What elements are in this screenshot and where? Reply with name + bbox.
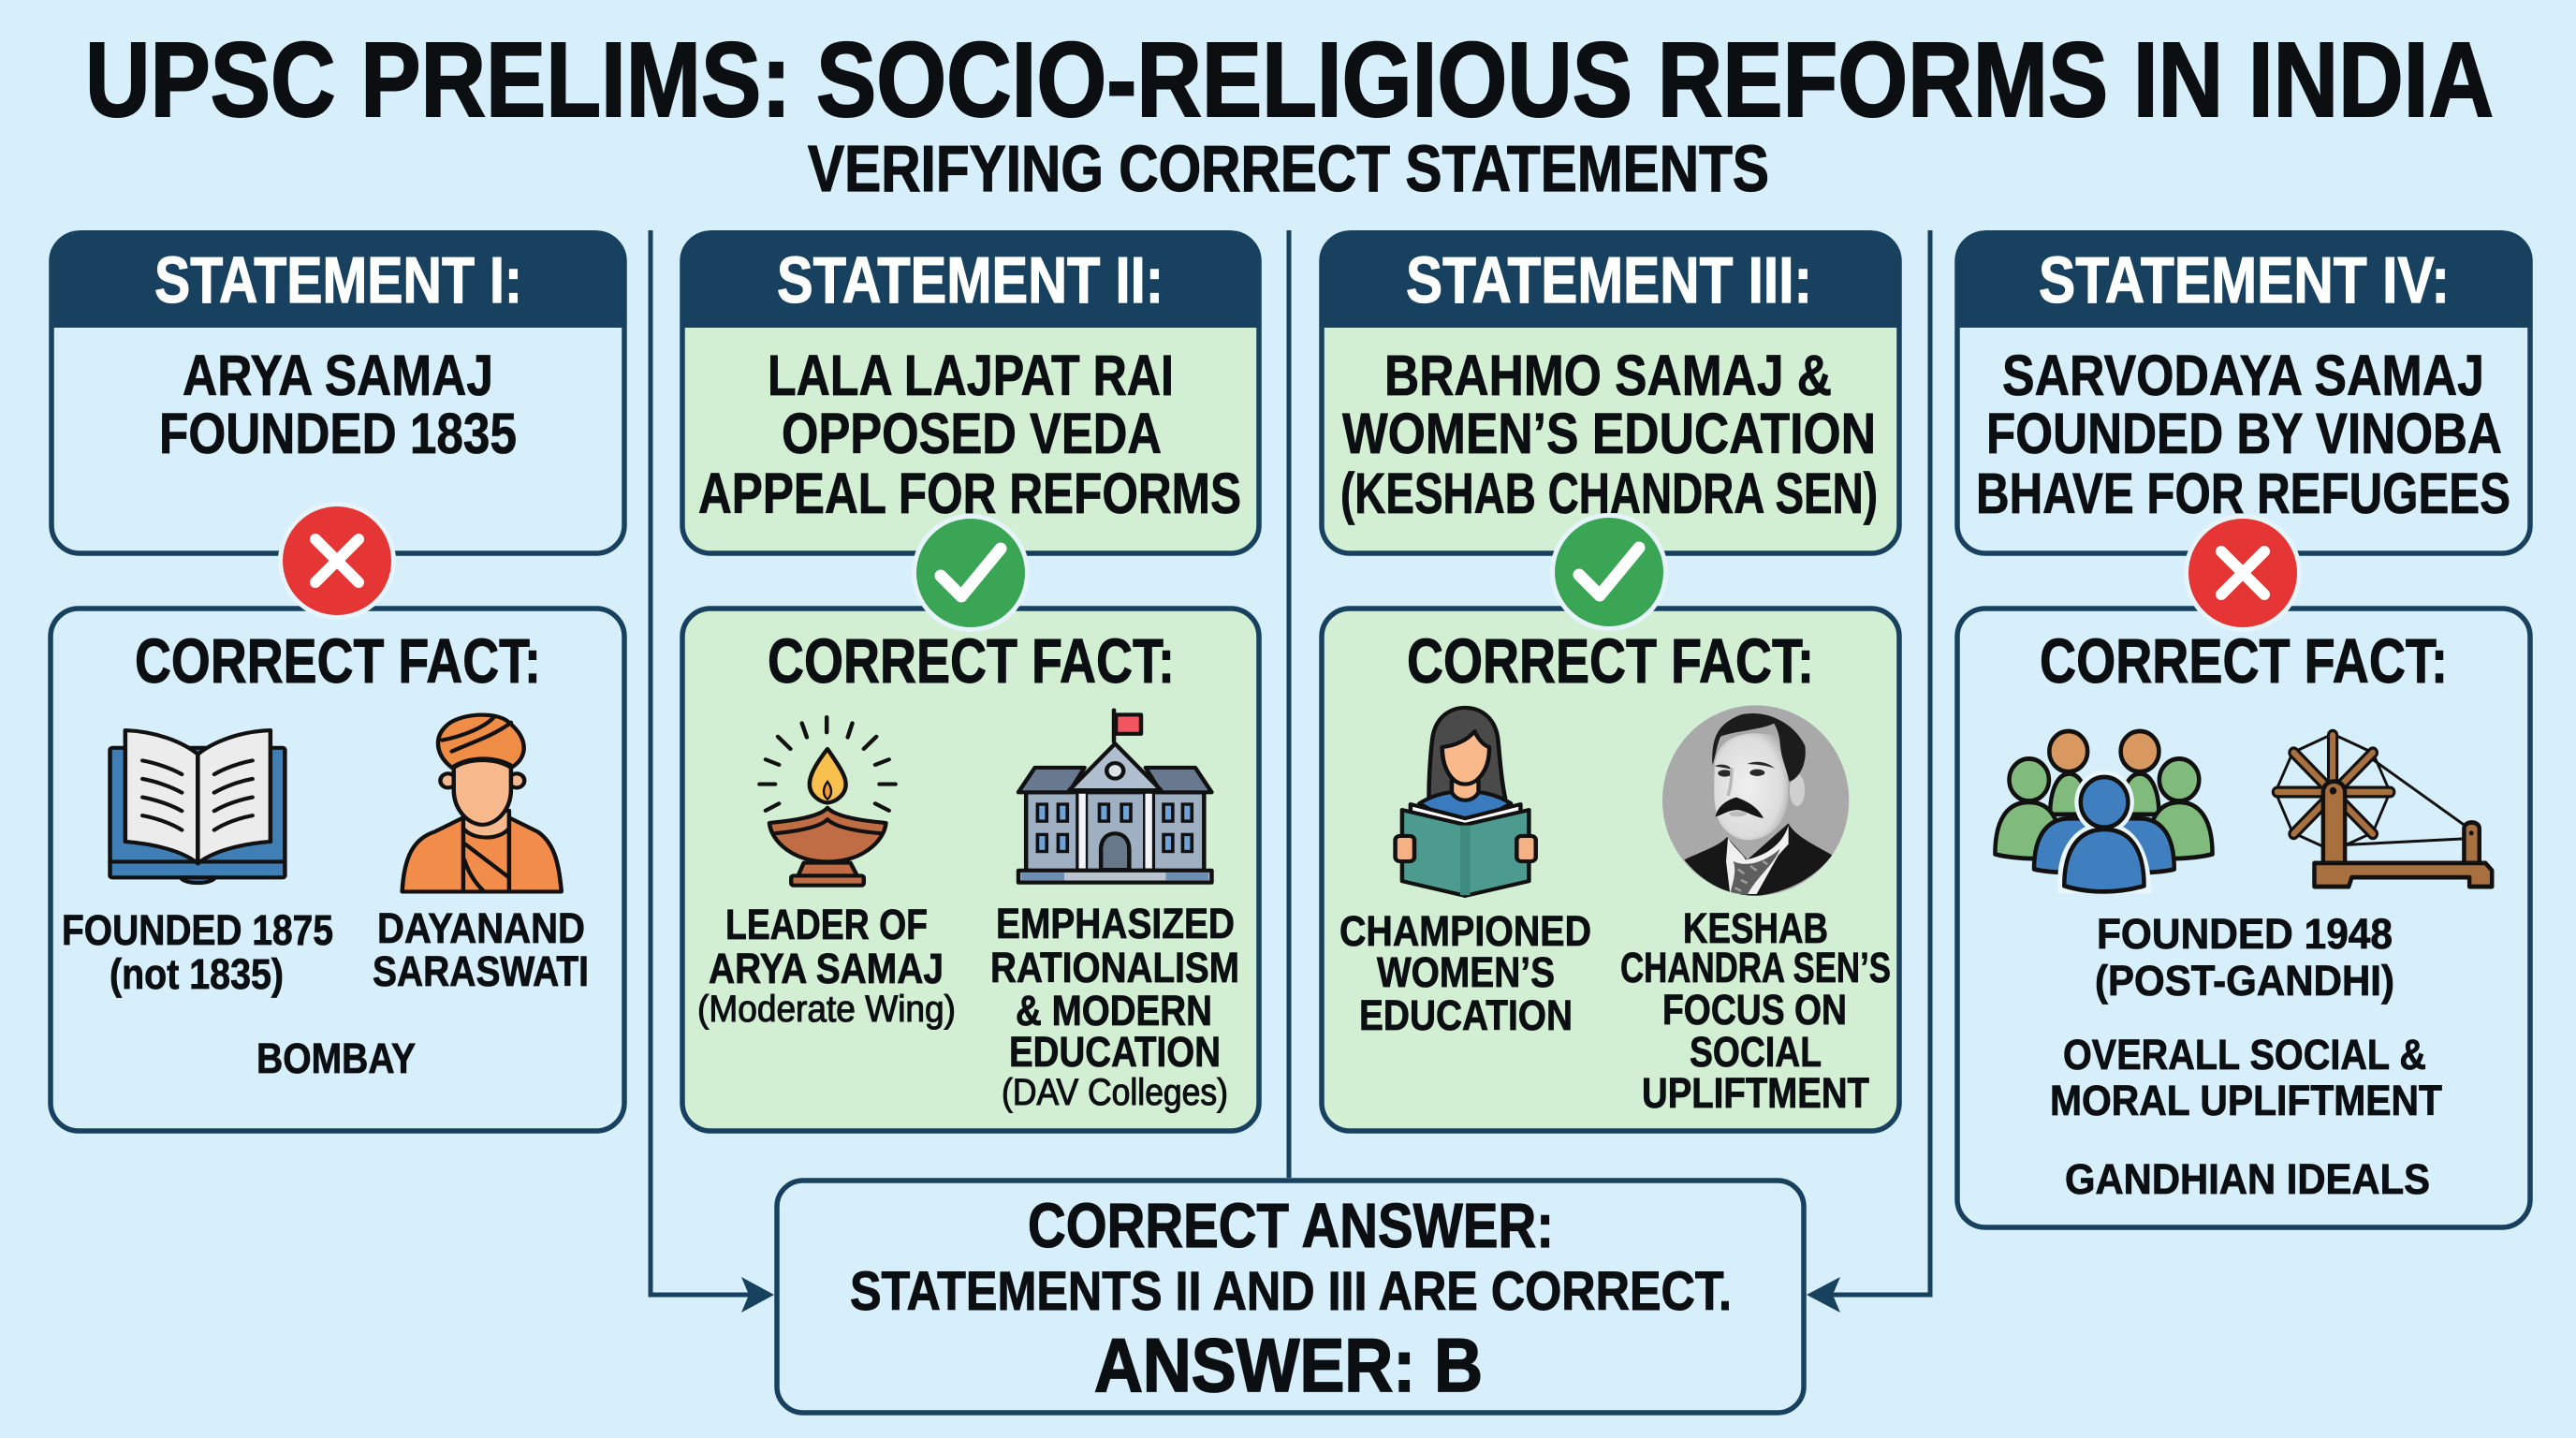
- text: women's education: EDUCATION: [1359, 991, 1573, 1039]
- icon: open book: [110, 730, 285, 883]
- text: statement IV claim: SARVODAYA SAMAJ: [2002, 344, 2484, 407]
- icon: spinning wheel: [2276, 734, 2492, 887]
- text: rationalism and education: [990, 900, 1239, 1113]
- text: rationalism and education: (DAV Colleges): [1002, 1072, 1228, 1113]
- icon: girl reading: [1396, 708, 1536, 896]
- arrow: right connector into answer box: [1807, 230, 1930, 1313]
- icon: green check badge III: [1550, 513, 1668, 631]
- text: statement II claim: APPEAL FOR REFORMS: [698, 462, 1241, 525]
- heading: statement I: STATEMENT I:: [154, 243, 522, 316]
- text: statement I claim: ARYA SAMAJ: [183, 344, 493, 407]
- panel: correct fact II: [682, 609, 1259, 1131]
- text: leader of Arya Samaj: (Moderate Wing): [697, 989, 956, 1030]
- text: founding date: (not 1835): [110, 950, 284, 998]
- text: statement III claim: BRAHMO SAMAJ &: [1384, 344, 1832, 407]
- panel: statement I: [51, 230, 625, 553]
- text: founder: [373, 904, 589, 995]
- text: place: BOMBAY: [256, 1034, 416, 1082]
- text: leader of Arya Samaj: [697, 901, 956, 1030]
- text: Gandhian ideals: GANDHIAN IDEALS: [2065, 1155, 2430, 1203]
- text: correct statements: STATEMENTS II AND III ARE CORRECT.: [850, 1261, 1732, 1322]
- text: rationalism and education: RATIONALISM: [990, 944, 1239, 991]
- text: statement III claim: WOMEN’S EDUCATION: [1342, 402, 1876, 465]
- text: founder: DAYANAND: [377, 904, 585, 952]
- heading: statement III: STATEMENT III:: [1406, 243, 1812, 316]
- text: Keshab Chandra Sen focus: FOCUS ON: [1662, 986, 1847, 1034]
- text: women's education: [1339, 907, 1591, 1039]
- heading: correct answer: CORRECT ANSWER:: [1028, 1191, 1554, 1261]
- icon: portrait of Keshab Chandra Sen: [1662, 705, 1849, 896]
- heading: correct fact IV: CORRECT FACT:: [2040, 626, 2448, 697]
- text: statement II claim: LALA LAJPAT RAI: [768, 344, 1174, 407]
- text: answer B: ANSWER: B: [1094, 1324, 1483, 1408]
- text: rationalism and education: & MODERN: [1016, 987, 1212, 1034]
- text: statement III claim: [1340, 344, 1878, 525]
- panel: correct fact III: [1322, 609, 1899, 1131]
- text: founding date: FOUNDED 1875: [62, 906, 333, 954]
- icon: turbaned reformer: [402, 715, 562, 891]
- text: statement I claim: [159, 344, 517, 465]
- text: founder: SARASWATI: [373, 947, 589, 995]
- icon: green check badge II: [912, 514, 1030, 632]
- text: founded 1948: (POST-GANDHI): [2095, 957, 2394, 1005]
- heading: correct fact I: CORRECT FACT:: [135, 626, 541, 697]
- heading: statement IV: STATEMENT IV:: [2039, 243, 2450, 316]
- text: Keshab Chandra Sen focus: UPLIFTMENT: [1642, 1069, 1869, 1117]
- text: founded 1948: FOUNDED 1948: [2097, 910, 2393, 958]
- panel: statement IV: [1956, 230, 2531, 553]
- heading: correct fact III: CORRECT FACT:: [1407, 626, 1814, 697]
- panel: statement II: [681, 230, 1260, 553]
- connector: centre line into answer box: [1286, 230, 1292, 1178]
- text: overall upliftment: MORAL UPLIFTMENT: [2050, 1077, 2442, 1124]
- text: overall upliftment: OVERALL SOCIAL &: [2063, 1031, 2426, 1078]
- icon: oil lamp: [759, 717, 896, 886]
- text: rationalism and education: EMPHASIZED: [996, 900, 1235, 947]
- text: statement II claim: OPPOSED VEDA: [782, 402, 1162, 465]
- text: rationalism and education: EDUCATION: [1009, 1028, 1221, 1076]
- text: statement II claim: [698, 344, 1241, 525]
- text: Keshab Chandra Sen focus: [1620, 904, 1891, 1117]
- text: Keshab Chandra Sen focus: KESHAB: [1683, 904, 1828, 952]
- text: Keshab Chandra Sen focus: CHANDRA SEN’S: [1620, 944, 1891, 991]
- icon: group of people: [1995, 731, 2213, 893]
- icon: college building: [1018, 711, 1211, 883]
- text: women's education: WOMEN’S: [1377, 948, 1555, 996]
- text: founded 1948: [2095, 910, 2394, 1005]
- text: leader of Arya Samaj: ARYA SAMAJ: [709, 945, 944, 992]
- text: women's education: CHAMPIONED: [1339, 907, 1591, 955]
- panel: correct fact I: [51, 609, 624, 1131]
- subtitle: VERIFYING CORRECT STATEMENTS: [808, 132, 1769, 205]
- icon: red cross badge I: [278, 502, 396, 620]
- panel: correct fact IV: [1957, 609, 2530, 1227]
- text: statement IV claim: [1976, 344, 2510, 525]
- text: leader of Arya Samaj: LEADER OF: [725, 901, 928, 948]
- panel: correct answer: [777, 1181, 1804, 1413]
- panel: statement III: [1321, 230, 1900, 553]
- heading: statement II: STATEMENT II:: [777, 243, 1164, 316]
- text: Keshab Chandra Sen focus: SOCIAL: [1690, 1028, 1822, 1076]
- icon: red cross badge IV: [2184, 514, 2302, 632]
- text: statement III claim: (KESHAB CHANDRA SEN): [1340, 462, 1878, 525]
- text: statement I claim: FOUNDED 1835: [159, 402, 517, 465]
- text: founding date: [62, 906, 333, 998]
- text: overall upliftment: [2050, 1031, 2442, 1124]
- arrow: left connector into answer box: [651, 230, 774, 1313]
- heading: correct fact II: CORRECT FACT:: [768, 626, 1175, 697]
